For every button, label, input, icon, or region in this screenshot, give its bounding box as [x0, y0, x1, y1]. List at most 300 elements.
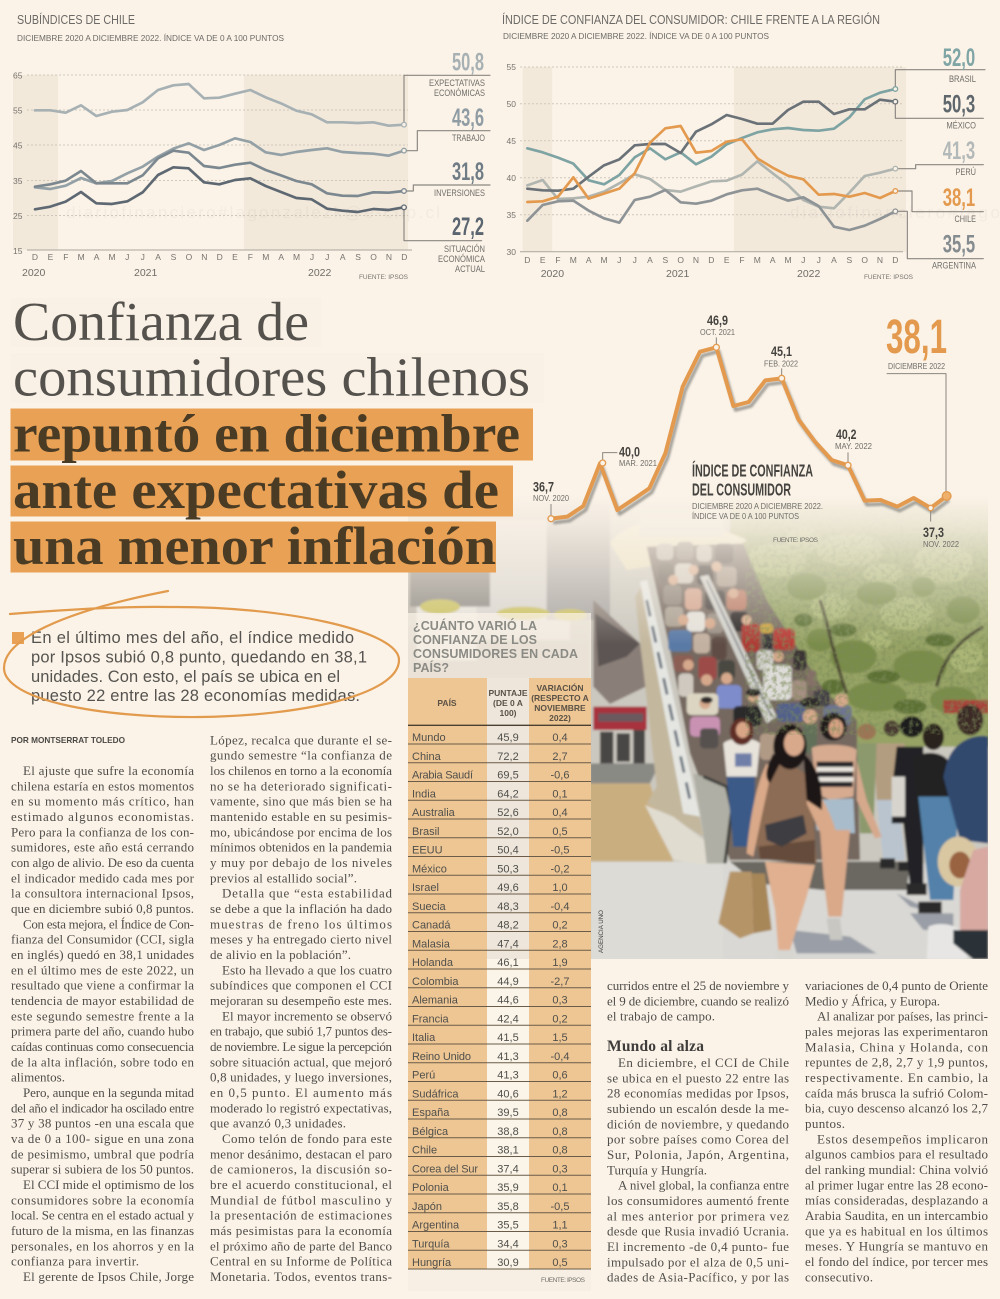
- article column 2: y muy por debajo de los niveles: [210, 855, 392, 870]
- article column 2: de camioneros, la discusión so-: [210, 1162, 392, 1177]
- article column 4: Estos desempeños implicaron: [817, 1131, 988, 1146]
- article column 1: [11, 763, 195, 1284]
- article column 4: el fondo del índice, por tercer mes: [805, 1254, 988, 1269]
- table rows: score: 49,6: [497, 882, 519, 894]
- x axis months: F: [248, 252, 253, 262]
- article column 2: meses y ha entregado cierto nivel: [210, 932, 392, 947]
- value labels: 27,2: [452, 213, 484, 241]
- table rows: country: Alemania: [412, 994, 459, 1006]
- x axis months: A: [770, 255, 776, 265]
- chart subtitle: DICIEMBRE 2020 A DICIEMBRE 2022. ÍNDICE VA DE 0 A 100 PUNTOS: [17, 33, 284, 43]
- article column 1: en su momento más crítico, han: [11, 794, 194, 809]
- value labels: [452, 49, 484, 241]
- table rows: score: 41,5: [497, 1032, 519, 1044]
- table rows: score: 34,4: [497, 1238, 519, 1250]
- article column 2: moderado lo registró expectativas,: [210, 1100, 392, 1115]
- article column 3: se ubica en el puesto 22 entre las: [607, 1070, 789, 1085]
- article column 4: del ranking mundial: China volvió: [805, 1162, 988, 1177]
- x axis months: A: [278, 252, 284, 262]
- article column 2: Central en su Informe de Política: [210, 1254, 392, 1269]
- subheading: Mundo al alza: [607, 1038, 704, 1055]
- article column 1: Pero, aunque en la segunda mitad: [23, 1085, 194, 1100]
- x axis months: J: [125, 252, 129, 262]
- table rows: country: Mundo: [412, 732, 446, 744]
- table rows: variation: 1,1: [552, 1220, 568, 1232]
- value labels: 50,3: [943, 91, 975, 119]
- article column 2: se debe a que la inflación ha dado: [210, 901, 392, 916]
- table rows: country: EEUU: [412, 844, 443, 856]
- year labels: [541, 268, 821, 280]
- x axis months: M: [78, 252, 85, 262]
- article column 1: futuro de la misma, en las finanzas: [11, 1223, 194, 1238]
- y axis labels: 30: [506, 247, 516, 257]
- callout text: unidades. Con esto, el país se ubica en el: [31, 668, 340, 686]
- article column 2: de noviembre. Le sigue la percepción: [210, 1039, 392, 1054]
- article column 2: gundo semestre “la confianza de: [210, 748, 392, 763]
- x axis months: F: [739, 255, 745, 265]
- man with hat: [938, 837, 979, 887]
- big value date: DICIEMBRE 2022: [888, 362, 945, 371]
- x axis months: O: [370, 252, 377, 262]
- article column 2: Mundial de fútbol masculino y: [210, 1192, 392, 1207]
- value labels: 35,5: [943, 231, 975, 259]
- x axis months: J: [325, 252, 329, 262]
- table rows: variation: -0,5: [551, 844, 569, 856]
- article column 2: el próximo año de parte del Banco: [210, 1238, 392, 1253]
- article column 2: más pesimistas para la economía: [210, 1223, 392, 1238]
- table rows: score: 41,3: [497, 1070, 519, 1082]
- country names: MÉXICO: [946, 120, 976, 132]
- table rows: country: Holanda: [412, 957, 454, 969]
- article column 3: Sur, Polonia, Japón, Argentina,: [607, 1147, 789, 1162]
- photo base: [590, 528, 988, 959]
- table rows: variation: 0,3: [552, 1238, 568, 1250]
- value labels: 38,1: [943, 184, 975, 212]
- table rows: score: 48,2: [497, 920, 519, 932]
- x axis months: E: [540, 255, 546, 265]
- article column 4: Al analizar por países, las princi-: [817, 1009, 988, 1024]
- table rows: country: China: [412, 751, 442, 763]
- woman with striped top: [820, 713, 847, 741]
- article column 1: local. Se centra en el estado actual y: [11, 1208, 194, 1223]
- x axis months: O: [186, 252, 193, 262]
- background crowd heads: [668, 562, 848, 724]
- x axis months: O: [677, 255, 684, 265]
- x axis months: J: [633, 255, 637, 265]
- series names: EXPECTATIVAS: [429, 78, 485, 89]
- series names: ECONÓMICA: [438, 254, 486, 265]
- main line with shadow: [548, 337, 951, 523]
- table title: CONFIANZA DE LOS: [413, 633, 537, 647]
- table rows: variation: -0,6: [551, 770, 569, 782]
- data point labels: NOV. 2020: [533, 494, 570, 503]
- article column 2: Monetaria. Todos, eventos trans-: [210, 1269, 392, 1284]
- value labels: 52,0: [943, 44, 975, 72]
- article column 2: López, recalca que durante el se-: [210, 732, 392, 747]
- article column 2: El mayor incremento se observó: [222, 1008, 392, 1023]
- table rows: variation: 1,2: [552, 1088, 568, 1100]
- data point labels: 37,3: [923, 524, 944, 540]
- headline: bold highlighted lines: una menor inflación: [13, 516, 496, 576]
- table title: CONSUMIDORES EN CADA: [413, 647, 578, 661]
- table rows: variation: -0,4: [551, 901, 569, 913]
- x axis months: D: [217, 252, 223, 262]
- table rows: variation: [551, 732, 569, 1269]
- article column 2: de alivio en la población”.: [210, 947, 351, 962]
- x axis months: F: [63, 252, 68, 262]
- article column 3: dades de Asia-Pacífico, y por las: [607, 1270, 789, 1285]
- year labels: 2021: [134, 267, 158, 279]
- article column 1: El gerente de Ipsos Chile, Jorge: [23, 1269, 194, 1284]
- table title: PAÍS?: [413, 660, 449, 675]
- table rows: country: Israel: [412, 882, 439, 894]
- table rows: score: 39,5: [497, 1107, 519, 1119]
- table rows: variation: 1,9: [552, 957, 568, 969]
- article column 4: bia, cuyo descenso alcanzó los 2,7: [805, 1101, 988, 1116]
- article column 4: puntos.: [805, 1116, 845, 1131]
- table rows: score: 47,4: [497, 938, 519, 950]
- table rows: score: 35,5: [497, 1220, 519, 1232]
- article column 1: El ajuste que sufre la economía: [23, 763, 194, 778]
- table rows: score: 44,9: [497, 976, 519, 988]
- article column 1: va de 0 a 100- sigue en una zona: [11, 1131, 194, 1146]
- y axis labels: 55: [13, 106, 23, 116]
- table rows: score: 72,2: [497, 751, 519, 763]
- table rows: country: Suecia: [412, 901, 447, 913]
- article column 2: Esto ha llevado a que los cuatro: [222, 962, 392, 977]
- photo top fade: [408, 495, 988, 645]
- data point labels: FEB. 2022: [764, 360, 798, 369]
- y axis labels: 45: [506, 136, 516, 146]
- x axis months: S: [171, 252, 177, 262]
- table header: [437, 682, 589, 723]
- canopy structure: [612, 534, 746, 570]
- article column 1: en el último mes de este 2022, un: [11, 962, 194, 977]
- chart title: DEL CONSUMIDOR: [692, 480, 791, 500]
- value labels: 31,8: [452, 158, 484, 186]
- article column 1: Pero para la confianza de los con-: [11, 824, 194, 839]
- table rows: variation: -0,5: [551, 1201, 569, 1213]
- data point labels: OCT. 2021: [700, 328, 735, 337]
- table rows: score: 35,8: [497, 1201, 519, 1213]
- x axis months: A: [94, 252, 100, 262]
- table rows: score: 50,4: [497, 844, 519, 856]
- article column 4: meses. Y Hungría se mantuvo en: [805, 1239, 988, 1254]
- article column 1: El CCI mide el optimismo de los: [23, 1177, 194, 1192]
- article column 1: chilena estaría en estos momentos: [11, 778, 194, 793]
- table title: [413, 618, 578, 675]
- callout text: por Ipsos subió 0,8 punto, quedando en 38,1: [31, 648, 367, 666]
- photo credit: AGENCIA UNO: [598, 910, 605, 953]
- article column 2: la presentación de estimaciones: [210, 1208, 392, 1223]
- chart panel: Chile frente a la región: [502, 12, 1000, 281]
- table rows: score: [497, 732, 519, 1269]
- article column 2: mo, ubicándose por encima de los: [210, 824, 392, 839]
- headline: light lines: Confianza de: [13, 291, 309, 352]
- table header: VARIACIÓN: [536, 682, 584, 693]
- source: FUENTE: IPSOS: [359, 274, 409, 281]
- foreground woman in brown: [753, 763, 817, 863]
- leaf texture: [745, 548, 988, 735]
- table rows: country: Reino Unido: [412, 1051, 471, 1063]
- woman in white top: [723, 738, 760, 777]
- four subindex lines: [35, 75, 490, 241]
- article column 3: subiendo un escalón desde la me-: [607, 1101, 789, 1116]
- article column 2: no se ha deteriorado significati-: [210, 778, 392, 793]
- table rows: score: 44,6: [497, 994, 519, 1006]
- table header: PUNTAJE: [488, 688, 528, 698]
- x axis months: A: [155, 252, 161, 262]
- year labels: 2021: [666, 268, 690, 280]
- table rows: score: 64,2: [497, 788, 519, 800]
- data point labels: [533, 312, 960, 549]
- headline: [10, 291, 544, 576]
- table rows: score: 69,5: [497, 770, 519, 782]
- table header: NOVIEMBRE: [534, 703, 586, 713]
- chart subtitle: ÍNDICE VA DE 0 A 100 PUNTOS: [692, 511, 799, 521]
- country names: [932, 74, 977, 272]
- article column 1: fianza del Consumidor (CCI, sigla: [11, 932, 194, 947]
- table rows: country: Perú: [412, 1070, 435, 1082]
- x axis months: M: [570, 255, 577, 265]
- x axis months: M: [293, 252, 300, 262]
- article column 1: con algo de alivio. De eso da cuenta: [11, 855, 194, 870]
- table header: (DE 0 A: [493, 698, 523, 708]
- series names: ECONÓMICAS: [434, 88, 485, 99]
- value labels: [943, 44, 975, 259]
- y axis labels: [506, 62, 516, 257]
- x axis months: J: [141, 252, 145, 262]
- article column 1: primera parte del año, cuando hubo: [11, 1024, 194, 1039]
- data point labels: NOV. 2022: [923, 540, 960, 549]
- table rows: country: Argentina: [412, 1220, 460, 1232]
- article column 2: en trabajo, que subió 1,7 puntos des-: [210, 1024, 392, 1039]
- y axis labels: 35: [506, 210, 516, 220]
- table rows: country: España: [412, 1107, 450, 1119]
- article column 1: sumidores, este año está cerrando: [11, 840, 194, 855]
- table title background: [408, 613, 591, 678]
- table rows: country: India: [412, 788, 437, 800]
- article column 4: algunos cambios para el resultado: [805, 1147, 988, 1162]
- chart title: [692, 460, 813, 500]
- article column 1: superar si subiera de los 50 puntos.: [11, 1162, 194, 1177]
- x axis months: S: [662, 255, 668, 265]
- data point labels: 40,2: [836, 426, 857, 442]
- year labels: 2020: [541, 268, 564, 280]
- article column 1: resultado que viene a confirmar la: [11, 978, 194, 993]
- country names: CHILE: [954, 214, 976, 225]
- ground: [590, 763, 660, 783]
- table rows: variation: 1,5: [552, 1032, 568, 1044]
- table rows: score: 52,6: [497, 807, 519, 819]
- y axis labels: 25: [13, 211, 23, 221]
- x axis months: J: [817, 255, 821, 265]
- table rows: country: Sudáfrica: [412, 1088, 459, 1100]
- article column 2: mínimos obtenidos en la pandemia: [210, 840, 392, 855]
- x axis months: D: [401, 252, 407, 262]
- data point labels: 40,0: [619, 444, 640, 460]
- table rows: variation: 0,5: [552, 1257, 568, 1269]
- headline: bold highlighted lines: repuntó en diciembre: [13, 404, 520, 464]
- headline: bold highlighted lines: [13, 404, 520, 576]
- callout text: En el último mes del año, el índice medido: [31, 629, 354, 647]
- year labels: 2022: [308, 267, 332, 279]
- article column 3: al mes anterior por primera vez: [607, 1208, 789, 1223]
- series names: SITUACIÓN: [444, 244, 485, 255]
- article column 1: la consultora internacional Ipsos,: [11, 886, 194, 901]
- value labels: 41,3: [943, 137, 975, 165]
- article column 3: el trabajo de campo.: [607, 1009, 715, 1024]
- chart panel: subíndices de Chile: diariofinanciero#lagonzalezk@e-clip.cl: [66, 203, 440, 222]
- article column 1: de la alta inflación, sobre todo en: [11, 1054, 194, 1069]
- x axis months: D: [708, 255, 714, 265]
- article column 3: El incremento -de 0,4 punto- fue: [607, 1239, 789, 1254]
- article column 4: variaciones de 0,4 punto de Oriente: [805, 978, 988, 993]
- table rows: variation: 0,4: [552, 807, 568, 819]
- article column 3: [607, 978, 790, 1285]
- table rows: score: 30,9: [497, 1257, 519, 1269]
- chart subtitle: DICIEMBRE 2020 A DICIEMBRE 2022.: [692, 501, 823, 511]
- article column 4: Arabia Saudita, en un intercambio: [805, 1208, 988, 1223]
- dark awning: [593, 600, 646, 704]
- table rows: variation: 0,2: [552, 920, 568, 932]
- article column 2: vamente, sino que más bien se ha: [210, 794, 392, 809]
- x axis months: A: [340, 252, 346, 262]
- article column 2: en 0,5 punto. El aumento más: [210, 1085, 392, 1100]
- table rows: variation: 0,3: [552, 994, 568, 1006]
- article column 1: en inglés) quedó en 38,1 unidades: [11, 947, 194, 962]
- chart subtitle: DICIEMBRE 2020 A DICIEMBRE 2022. ÍNDICE VA DE 0 A 100 PUNTOS: [503, 31, 769, 41]
- table rows: variation: -0,4: [551, 1051, 569, 1063]
- article column 2: los chilenos en torno a la economía: [210, 763, 392, 778]
- panel: country table: [408, 613, 591, 1291]
- article column 3: impulsado por el alza de 0,5 uni-: [607, 1254, 789, 1269]
- table rows: score: 50,3: [497, 863, 519, 875]
- table header: 100): [499, 708, 517, 718]
- table rows: variation: 0,8: [552, 1126, 568, 1138]
- article column 3: Turquía y Hungría.: [607, 1162, 707, 1177]
- left background figures: [600, 730, 645, 767]
- article column 1: Con esta mejora, el Índice de Con-: [23, 916, 194, 931]
- bullet: [12, 632, 24, 644]
- table rows: country: México: [412, 863, 447, 875]
- table rows: variation: 0,3: [552, 1163, 568, 1175]
- article column 4: respectivamente. En cambio, la: [805, 1070, 988, 1085]
- table rows: variation: 0,8: [552, 1144, 568, 1156]
- table rows: variation: 0,1: [552, 1182, 568, 1194]
- chart panel: Chile frente a la región: diariofinanciero#lago: [790, 203, 1000, 222]
- x axis months: N: [386, 252, 392, 262]
- table rows: score: 38,1: [497, 1144, 519, 1156]
- y axis labels: 15: [13, 246, 23, 256]
- table rows: country: Malasia: [412, 938, 451, 950]
- x axis months: J: [801, 255, 805, 265]
- x axis months: N: [201, 252, 207, 262]
- article column 3: A nivel global, la confianza entre: [618, 1178, 789, 1193]
- table rows: variation: 0,6: [552, 1070, 568, 1082]
- table rows: country: Chile: [412, 1144, 437, 1156]
- source: FUENTE: IPSOS: [864, 274, 914, 281]
- photo: crowd on escalator: [403, 493, 990, 967]
- data point labels: 46,9: [707, 312, 728, 328]
- article column 1: alimentos.: [11, 1070, 65, 1085]
- year labels: [22, 267, 332, 279]
- line chart: índice de confianza del consumidor: [533, 311, 960, 549]
- x axis months: M: [108, 252, 116, 262]
- table rows: country: Brasil: [412, 826, 440, 838]
- article column 4: al primer lugar entre las 28 econo-: [805, 1177, 988, 1192]
- crowd mass: [647, 543, 860, 860]
- x axis months: D: [32, 252, 38, 262]
- y axis labels: 55: [506, 62, 516, 72]
- table rows: score: 38,8: [497, 1126, 519, 1138]
- table rows: country: Turquía: [412, 1238, 450, 1250]
- headline: light lines: [13, 291, 530, 408]
- series names: INVERSIONES: [434, 188, 485, 199]
- value labels: 43,6: [452, 104, 484, 132]
- big value: 38,1: [886, 311, 947, 364]
- article column 4: [805, 978, 988, 1284]
- table rows: country: Australia: [412, 807, 456, 819]
- table rows: country: Arabia Saudí: [412, 770, 473, 782]
- right crowd: [884, 720, 900, 736]
- x axis months: E: [48, 252, 54, 262]
- article column 1: 37 y 38 puntos -en una escala que: [11, 1116, 194, 1131]
- table rows: country: Colombia: [412, 976, 459, 988]
- y axis labels: 35: [13, 176, 23, 186]
- table rows: score: 35,9: [497, 1182, 519, 1194]
- table rows: variation: 0,8: [552, 1107, 568, 1119]
- y axis labels: [13, 70, 23, 256]
- article column 2: Detalla que “esta estabilidad: [222, 886, 392, 901]
- callout: summary circled: [4, 591, 399, 717]
- five country lines: [527, 70, 985, 259]
- article column 4: consecutivo.: [805, 1269, 873, 1284]
- chart title: ÍNDICE DE CONFIANZA: [692, 460, 813, 481]
- table header: (RESPECTO A: [531, 693, 589, 703]
- table source: FUENTE: IPSOS: [541, 1277, 586, 1284]
- article column 4: repuntes de 2,8, 2,7 y 1,9 puntos,: [805, 1055, 988, 1070]
- table title: ¿CUÁNTO VARIÓ LA: [413, 618, 537, 633]
- x axis months: O: [861, 255, 868, 265]
- article column 4: caída más brusca la sufrió Colom-: [805, 1085, 988, 1100]
- series names: [429, 78, 486, 275]
- table rows: country: Francia: [412, 1013, 450, 1025]
- x axis months: M: [784, 255, 792, 265]
- article column 2: 0,8 unidades, y luego inversiones,: [210, 1070, 392, 1085]
- chart heading: ÍNDICE DE CONFIANZA DEL CONSUMIDOR: CHILE FRENTE A LA REGIÓN: [502, 12, 880, 27]
- table rows: variation: 0,5: [552, 826, 568, 838]
- x axis months: S: [355, 252, 361, 262]
- year labels: 2020: [22, 267, 46, 279]
- table rows: variation: 0,2: [552, 1013, 568, 1025]
- table rows: country: Canadá: [412, 920, 451, 932]
- x axis months: N: [877, 255, 883, 265]
- trees: [730, 493, 990, 747]
- y axis labels: 65: [13, 70, 23, 80]
- article column 3: el 9 de diciembre, cuando se realizó: [607, 993, 789, 1008]
- headline: bold highlighted lines: ante expectativas de: [13, 460, 499, 520]
- table rows: variation: 2,7: [552, 751, 568, 763]
- paper bags: [718, 872, 753, 938]
- article column 1: que en diciembre subió 0,8 puntos.: [11, 901, 194, 916]
- table rows: country: Hungría: [412, 1257, 452, 1269]
- table rows: variation: -0,2: [551, 863, 569, 875]
- article column 2: Como telón de fondo para este: [222, 1131, 392, 1146]
- article column 1: estimado algunos economistas.: [11, 809, 194, 824]
- article column 1: personales, en los ahorros y en la: [11, 1238, 194, 1253]
- table rows: score: 37,4: [497, 1163, 519, 1175]
